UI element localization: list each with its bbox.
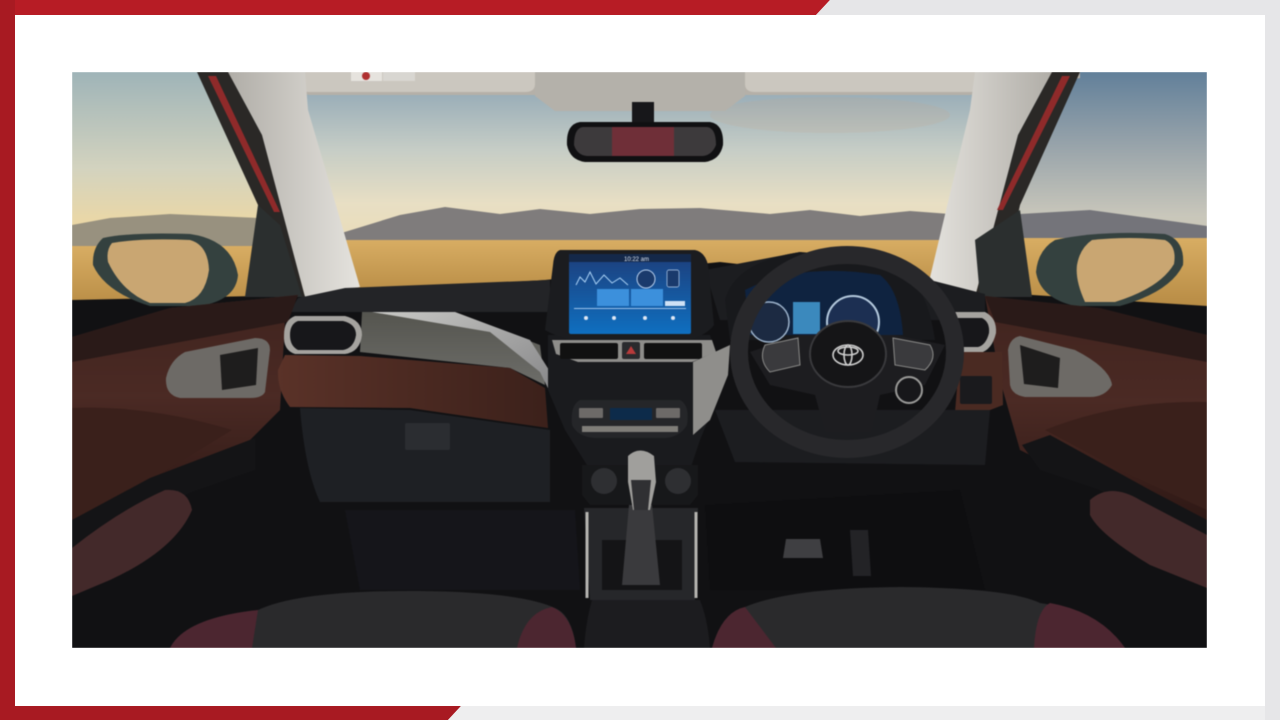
steering wheel: [739, 255, 955, 449]
hazard button: [622, 342, 640, 359]
left door frame red trim: [197, 72, 305, 297]
right brown dash strip: [955, 352, 1003, 412]
gear lever: [622, 450, 660, 585]
sun visor left: [293, 72, 535, 92]
touchscreen: 10:22 am: [624, 257, 649, 263]
centre stack trim right: [693, 345, 730, 435]
left door handle: [166, 338, 270, 398]
glove box: [300, 408, 550, 502]
frame: bottom red bar: [0, 706, 461, 720]
under column panel: [715, 410, 990, 465]
left vent: [284, 316, 362, 354]
left seat: [170, 591, 576, 648]
right A pillar: [927, 72, 1052, 297]
shifter surround: [582, 465, 698, 505]
right spoke buttons: [893, 338, 933, 370]
left lower door pad: [72, 408, 232, 520]
right armrest: [1090, 491, 1207, 588]
right wing mirror: [1036, 233, 1183, 306]
right vent: [955, 312, 996, 353]
frame: right grey bar: [1265, 0, 1280, 720]
wheel hub: [810, 321, 886, 387]
right cup knob: [665, 468, 691, 494]
left door panel: [72, 295, 298, 596]
right door frame red trim: [975, 72, 1080, 297]
brown dash strip: [278, 355, 548, 428]
right door pocket: [1022, 435, 1207, 535]
dash top: [290, 280, 550, 312]
touchscreen: [569, 254, 691, 334]
headliner: [200, 72, 1080, 95]
left wing mirror: [93, 234, 238, 306]
dash top right: [705, 252, 985, 320]
floor mats: [345, 510, 580, 590]
frame: left red bar: [0, 0, 15, 720]
pedal: [783, 539, 823, 558]
centre console: [584, 508, 698, 600]
left spoke buttons: [762, 338, 800, 372]
right door panel: [985, 296, 1207, 588]
sun visor right: [745, 72, 990, 92]
dash grey panel: [360, 312, 545, 385]
climate panel: [572, 400, 688, 438]
brake pedal: [850, 530, 871, 576]
right lower door pad: [1045, 402, 1207, 510]
frame: bottom grey bar: [448, 706, 1280, 720]
right door handle: [1008, 336, 1112, 397]
dashboard and cabin base: [72, 262, 1207, 648]
windscreen view: [300, 85, 980, 300]
rear-view mirror: [567, 102, 723, 162]
frame: top grey bar: [816, 0, 1280, 15]
car interior photo: [72, 72, 1207, 648]
warning sticker: [351, 72, 415, 81]
frame: top red bar: [0, 0, 830, 15]
toyota logo: [833, 345, 863, 365]
driver footwell: [705, 490, 985, 590]
glove box handle: [405, 423, 450, 450]
right door dark triangle: [975, 210, 1032, 297]
overhead console: [535, 72, 745, 111]
right seat: [712, 587, 1125, 648]
instrument display: [745, 271, 903, 348]
instrument binnacle: [725, 252, 935, 340]
left door pocket: [72, 438, 255, 548]
wheel rim: [739, 255, 955, 449]
start button: [896, 377, 922, 403]
switches: [960, 376, 992, 404]
left armrest: [72, 490, 192, 596]
right window view: [1010, 72, 1207, 312]
left A pillar: [228, 72, 360, 297]
wheel spokes: [750, 335, 945, 432]
left cup knob: [591, 468, 617, 494]
touchscreen surround: [545, 250, 714, 347]
armrest: [584, 600, 710, 648]
centre vents: [552, 340, 716, 362]
left window view: [72, 72, 272, 312]
silver dash trim: [372, 312, 568, 425]
left door dark triangle: [245, 205, 302, 297]
centre stack: [548, 335, 725, 470]
